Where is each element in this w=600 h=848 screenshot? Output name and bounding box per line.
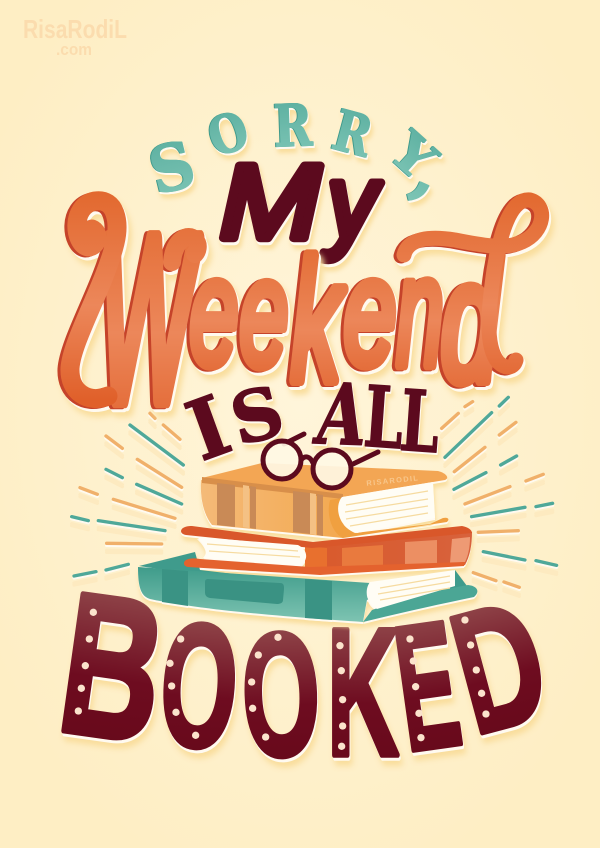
word: Is All: L xyxy=(397,371,443,472)
watermark logo: RisaRodiL xyxy=(23,14,127,44)
word: Is All: S xyxy=(223,369,292,462)
word: Booked: B xyxy=(48,551,177,786)
watermark logo xyxy=(23,14,127,59)
rays xyxy=(72,397,557,587)
glasses xyxy=(263,434,378,488)
word: Weekend: n xyxy=(396,226,444,398)
word: Sorry: O xyxy=(201,100,256,169)
word: Is All: L xyxy=(361,367,407,468)
word: Is All: A xyxy=(308,364,376,465)
watermark logo: .com xyxy=(56,40,92,59)
word: Is All: I xyxy=(175,377,242,480)
word: Sorry: Y xyxy=(378,119,449,192)
word: Weekend: W xyxy=(99,189,201,451)
watermark on book: RISARODIL xyxy=(366,473,420,488)
word: My: y xyxy=(322,143,382,261)
word: Sorry: R xyxy=(326,96,380,170)
word: Sorry: R xyxy=(273,92,314,161)
word: Weekend xyxy=(70,189,542,451)
book stack xyxy=(138,463,477,622)
word: Weekend: e xyxy=(344,226,396,396)
marquee dots xyxy=(75,609,490,750)
word: Booked xyxy=(48,551,565,795)
word: Weekend: k xyxy=(291,225,346,417)
word: My xyxy=(220,143,382,261)
word: Booked: O xyxy=(154,587,244,787)
teal book xyxy=(138,552,477,622)
word: Is All xyxy=(175,364,443,480)
word: Sorry: , xyxy=(403,132,456,212)
swash: W exit curl xyxy=(172,237,198,262)
word: My: M xyxy=(220,143,320,260)
word: Weekend: e xyxy=(240,229,288,398)
word: Booked: K xyxy=(327,591,399,795)
swash: W entry curl xyxy=(70,201,117,398)
word: Weekend: d xyxy=(441,225,502,417)
word: Booked: D xyxy=(434,564,565,771)
word: Booked: O xyxy=(239,597,323,794)
red-orange book xyxy=(181,526,472,575)
word: Sorry xyxy=(142,92,456,212)
orange book xyxy=(201,463,448,538)
swash: d ascender loop xyxy=(404,200,542,367)
word: Weekend: e xyxy=(190,228,238,397)
word: Sorry: S xyxy=(142,125,203,210)
word: Booked: E xyxy=(385,583,470,789)
